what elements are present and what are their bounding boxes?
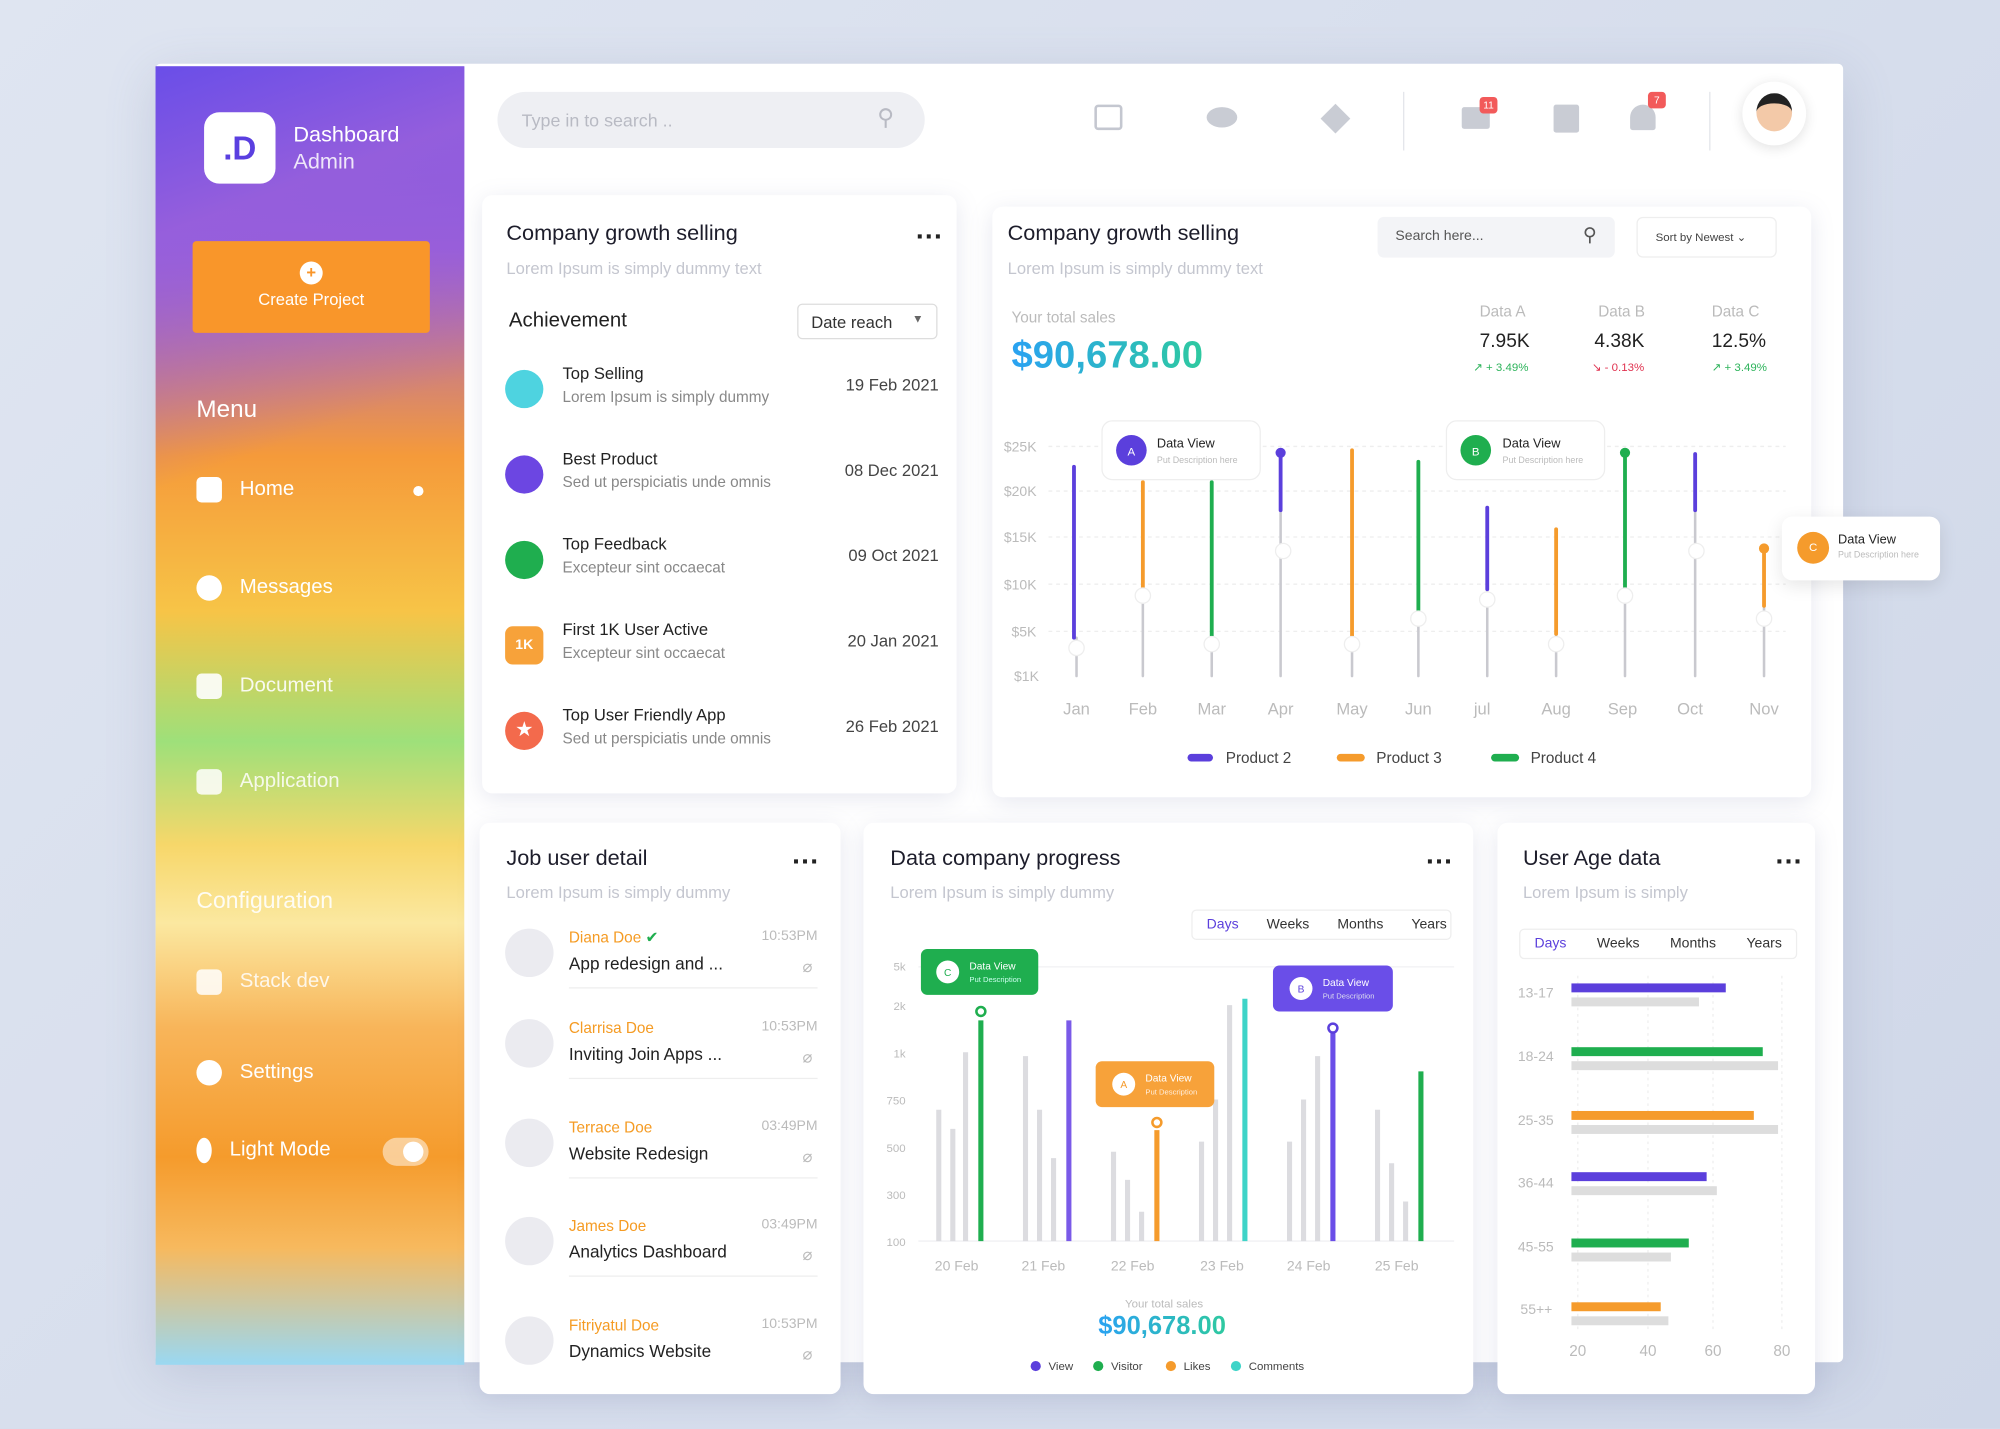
panel: data company progress (864, 823, 1473, 1394)
progress bar chart: B (1298, 984, 1305, 995)
lollipop chart: Put Description here (1503, 455, 1583, 465)
lollipop chart: Product 2 (1226, 750, 1291, 767)
create project button: + (306, 263, 316, 282)
panel: company growth chart: Data A (1480, 302, 1526, 320)
achievement list: Sed ut perspiciatis unde omnis (562, 730, 771, 747)
achievement list: Excepteur sint occaecat (562, 559, 725, 577)
lollipop chart: Data View (1503, 436, 1561, 451)
progress bar chart: A (1120, 1080, 1127, 1091)
lollipop chart: Aug (1541, 699, 1571, 718)
lollipop chart: Jan (1063, 699, 1090, 718)
job list: Dynamics Website (569, 1342, 711, 1361)
lollipop chart: B (1472, 446, 1480, 458)
callout: data view C: Data View (1838, 533, 1896, 547)
panel: company growth achievements: ▼ (912, 312, 923, 325)
panel: company growth achievements: ... (916, 213, 943, 245)
job list: 10:53PM (761, 1019, 818, 1034)
lollipop chart (1004, 420, 1786, 767)
age bar chart: 13-17 (1518, 984, 1554, 1000)
age bar chart: 36-44 (1518, 1174, 1554, 1190)
progress bar chart: 100 (886, 1237, 906, 1249)
achievement list: 20 Jan 2021 (847, 631, 939, 651)
text: Application (240, 770, 340, 792)
age bar chart: 55++ (1520, 1301, 1552, 1317)
panel: user age data (1497, 823, 1815, 1394)
panel: company growth chart (992, 207, 1811, 797)
job list: ⌀ (803, 1344, 812, 1364)
lollipop chart: $10K (1004, 576, 1037, 592)
lollipop chart: Sep (1608, 699, 1637, 718)
job list: Terrace Doe (569, 1119, 652, 1136)
lollipop chart: Nov (1749, 699, 1779, 718)
progress bar chart: Put Description (969, 975, 1021, 984)
text: Settings (240, 1061, 314, 1083)
achievement list: Top User Friendly App (562, 705, 726, 724)
callout: data view C (1782, 517, 1940, 580)
job list: ⌀ (803, 1047, 812, 1066)
lollipop chart: Product 3 (1376, 750, 1442, 767)
panel: company growth chart: Lorem Ipsum is simply dummy text (1008, 259, 1263, 278)
job list: Fitriyatul Doe (569, 1316, 659, 1334)
panel: user age data: Months (1670, 936, 1716, 952)
panel: company growth achievements: Achievement (509, 310, 627, 332)
panel: user age data: Years (1746, 936, 1782, 952)
text: Messages (240, 577, 333, 598)
job list: Analytics Dashboard (569, 1242, 727, 1261)
panel: company growth chart: Data B (1598, 302, 1645, 320)
lollipop chart: Put Description here (1157, 455, 1238, 465)
progress bar chart: Likes (1184, 1361, 1211, 1373)
panel: company growth chart: ⚲ (1583, 224, 1597, 246)
top icons: 11 (1483, 99, 1494, 111)
panel: company growth chart: Search here... (1395, 228, 1484, 244)
panel: user age data: ... (1776, 838, 1803, 870)
achievement list: 08 Dec 2021 (845, 460, 939, 480)
lollipop chart: May (1336, 699, 1368, 718)
callout: data view C: C (1809, 541, 1817, 554)
age bar chart: 18-24 (1518, 1048, 1554, 1064)
achievement list (505, 364, 939, 750)
search bar: ⚲ (877, 105, 894, 130)
progress bar chart: C (944, 968, 951, 979)
panel: company growth chart: Your total sales (1011, 309, 1116, 327)
panel: company growth achievements (482, 195, 957, 793)
panel: user age data: Lorem Ipsum is simply (1523, 883, 1688, 902)
lollipop chart: $25K (1004, 439, 1037, 455)
panel: data company progress: Days (1207, 917, 1239, 932)
panel: company growth chart: 7.95K (1480, 330, 1530, 352)
panel: company growth achievements: Company growth selling (506, 221, 738, 245)
job list: Inviting Join Apps ... (569, 1045, 722, 1064)
logo: .D (223, 129, 256, 167)
panel: job user detail: ... (792, 838, 819, 870)
panel: company growth chart: Data C (1712, 302, 1759, 320)
age bar chart: 25-35 (1518, 1112, 1554, 1128)
progress bar chart: 1k (893, 1048, 906, 1060)
panel: data company progress: ... (1426, 838, 1453, 870)
progress bar chart: 22 Feb (1111, 1257, 1155, 1273)
sidebar (156, 66, 464, 1365)
achievement list: Top Selling (562, 364, 644, 383)
callout: data view C: Put Description here (1838, 551, 1919, 560)
progress bar chart: Data View (1145, 1074, 1192, 1085)
achievement list: First 1K User Active (562, 620, 708, 639)
progress bar chart: 24 Feb (1287, 1257, 1331, 1273)
panel: data company progress: Lorem Ipsum is simply dummy (890, 883, 1114, 902)
achievement list: Top Feedback (562, 534, 667, 554)
progress bar chart: 750 (886, 1096, 906, 1108)
age bar chart (1518, 976, 1790, 1360)
job list (505, 928, 818, 1365)
achievement list: ★ (515, 719, 533, 741)
job list: 03:49PM (761, 1119, 818, 1134)
panel: company growth chart: ↗ + 3.49% (1712, 361, 1767, 374)
lollipop chart: Product 4 (1531, 750, 1597, 767)
age bar chart: 45-55 (1518, 1238, 1554, 1254)
achievement list: Best Product (562, 449, 657, 468)
progress bar chart: Data View (1323, 978, 1370, 989)
progress bar chart: 300 (886, 1190, 906, 1202)
achievement list: 09 Oct 2021 (848, 546, 939, 565)
panel: data company progress: Years (1411, 917, 1447, 932)
panel: company growth chart: Company growth selling (1008, 221, 1239, 245)
text: Stack dev (240, 971, 329, 992)
achievement list: Sed ut perspiciatis unde omnis (562, 473, 771, 491)
panel: job user detail (480, 823, 841, 1394)
create project button (193, 241, 430, 333)
age bar chart: 20 (1569, 1343, 1586, 1360)
panel: company growth chart: ↗ + 3.49% (1473, 361, 1528, 374)
progress bar chart: Put Description (1145, 1087, 1197, 1096)
progress bar chart (886, 949, 1454, 1373)
lollipop chart: jul (1473, 699, 1490, 718)
panel: company growth chart: $90,678.00 (1011, 334, 1203, 376)
menu items: Home (240, 478, 294, 500)
panel: job user detail: Job user detail (506, 846, 647, 870)
job list: App redesign and ... (569, 954, 723, 973)
progress bar chart: Visitor (1111, 1361, 1143, 1373)
lollipop chart: $5K (1011, 623, 1037, 639)
progress bar chart: 25 Feb (1375, 1257, 1419, 1273)
menu heading: Menu (196, 397, 257, 423)
main white frame (156, 64, 1843, 1362)
job list: Clarrisa Doe (569, 1019, 654, 1037)
panel: user age data: User Age data (1523, 846, 1660, 870)
job list: 03:49PM (761, 1217, 818, 1232)
lollipop chart: Data View (1157, 436, 1216, 451)
panel: job user detail: Lorem Ipsum is simply dummy (506, 883, 730, 902)
progress bar chart: Put Description (1323, 992, 1375, 1001)
lollipop chart: Feb (1129, 699, 1157, 718)
lollipop chart: Jun (1405, 699, 1432, 718)
progress bar chart: 2k (893, 1001, 906, 1013)
achievement list: Excepteur sint occaecat (562, 644, 725, 662)
panel: data company progress: Data company progress (890, 846, 1121, 870)
panel: company growth achievements: Lorem Ipsum is simply dummy text (506, 259, 762, 278)
job list: ⌀ (803, 1147, 812, 1166)
panel: user age data: Weeks (1597, 936, 1640, 952)
job list: 10:53PM (761, 1316, 818, 1332)
panel: data company progress: Weeks (1267, 917, 1309, 932)
text: 7 (1654, 94, 1660, 106)
job list: Diana Doe ✔ (569, 929, 658, 946)
create project button: Create Project (258, 290, 364, 309)
panel: data company progress: Months (1337, 917, 1383, 932)
search bar (497, 92, 925, 148)
panel: company growth chart: ↘ - 0.13% (1592, 361, 1644, 374)
lollipop chart: A (1128, 446, 1136, 458)
configuration: Configuration (196, 888, 333, 913)
job list: James Doe (569, 1217, 646, 1235)
panel: company growth achievements: Date reach (811, 312, 892, 332)
top icons (1094, 81, 1809, 151)
progress bar chart: 20 Feb (935, 1257, 979, 1273)
progress bar chart: Data View (969, 961, 1016, 972)
job list: Website Redesign (569, 1144, 708, 1163)
progress bar chart: 500 (886, 1143, 906, 1155)
text: Document (240, 675, 333, 696)
panel: data company progress: Your total sales (1125, 1297, 1203, 1310)
job list: ⌀ (803, 957, 812, 976)
lollipop chart: $20K (1004, 483, 1037, 499)
menu items (196, 477, 294, 502)
lollipop chart: $1K (1014, 668, 1040, 684)
lollipop chart: Mar (1197, 699, 1226, 718)
achievement list: 26 Feb 2021 (846, 717, 939, 736)
age bar chart: 80 (1773, 1343, 1790, 1360)
progress bar chart: 23 Feb (1200, 1257, 1244, 1273)
progress bar chart: View (1048, 1361, 1074, 1373)
panel: company growth chart: 12.5% (1712, 330, 1766, 352)
lollipop chart: Apr (1268, 699, 1294, 718)
logo: Dashboard (293, 122, 399, 147)
achievement list: Lorem Ipsum is simply dummy (562, 388, 769, 406)
progress bar chart: 21 Feb (1022, 1257, 1065, 1273)
age bar chart: 40 (1639, 1343, 1656, 1360)
progress bar chart: Comments (1249, 1361, 1304, 1373)
achievement list: 19 Feb 2021 (846, 375, 939, 394)
panel: user age data: Days (1534, 936, 1566, 952)
lollipop chart: Oct (1677, 699, 1703, 718)
search bar: Type in to search .. (522, 110, 673, 130)
progress bar chart: 5k (893, 962, 906, 974)
lollipop chart: $15K (1004, 529, 1037, 545)
job list: ⌀ (803, 1245, 812, 1264)
panel: data company progress: $90,678.00 (1098, 1312, 1226, 1341)
panel: company growth chart: Sort by Newest ⌄ (1656, 231, 1746, 244)
job list: 10:53PM (761, 929, 818, 944)
age bar chart: 60 (1705, 1343, 1722, 1360)
achievement list: 1K (515, 638, 533, 653)
panel: company growth chart: 4.38K (1594, 330, 1644, 352)
text: Light Mode (230, 1139, 331, 1161)
logo (204, 112, 399, 184)
logo: Admin (293, 149, 355, 173)
